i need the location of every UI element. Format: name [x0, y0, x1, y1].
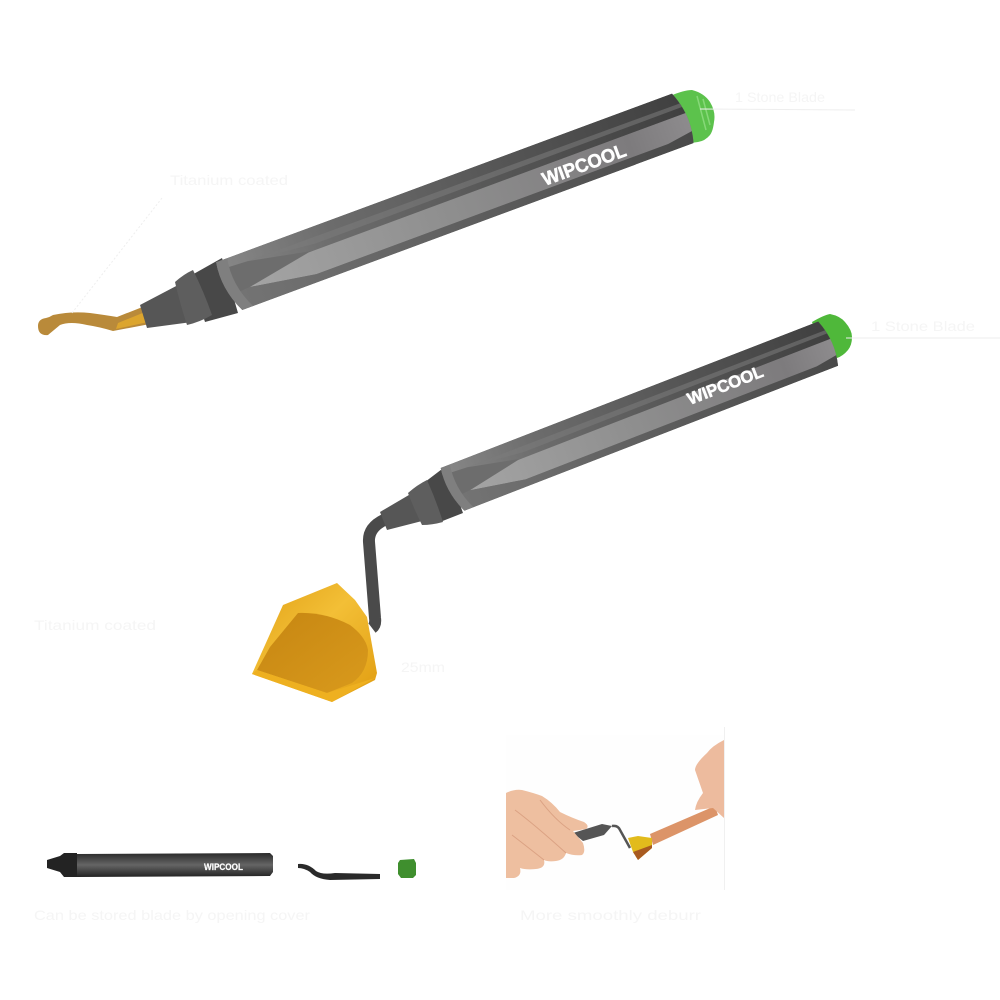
titanium coated blade: [38, 306, 150, 335]
photo background: [506, 735, 724, 890]
hooked shaft: [369, 519, 386, 628]
caption: storage: Can be stored blade by opening cover: [34, 907, 310, 923]
logo: WIPCOOL: [539, 140, 630, 191]
caption: deburr: More smoothly deburr: [520, 907, 701, 923]
gold cone cutter: [252, 583, 377, 702]
tool: hooked cone deburring pen: [252, 314, 852, 702]
small tool hook: [612, 826, 630, 848]
green cap: [812, 314, 852, 362]
left hand: [506, 790, 588, 878]
blade shank highlight: [116, 312, 148, 329]
small gold cone: [628, 836, 652, 860]
cone: [140, 284, 192, 328]
cutter face: [257, 613, 368, 693]
loose green cover: [398, 859, 416, 878]
finger creases: [512, 800, 570, 860]
photo: deburring a copper pipe: [506, 727, 724, 890]
label: blade middle: 1 Stone Blade: [871, 318, 975, 334]
collar ring: [408, 480, 443, 525]
collar ring: [175, 270, 212, 325]
label: titanium coated: Titanium coated: [170, 172, 288, 188]
cone: [380, 492, 426, 530]
bottom edge: [252, 670, 375, 702]
cone burnt edge: [633, 845, 652, 860]
loose blade: [298, 864, 380, 880]
cap ribs: [697, 96, 710, 130]
handle: [434, 316, 848, 516]
handle: [208, 87, 706, 317]
right hand: [695, 740, 724, 818]
small tool handle: [573, 824, 612, 841]
leader lines: [72, 109, 1000, 338]
tool: curved blade deburring pen: [38, 87, 714, 335]
dark cylinder: [425, 466, 463, 522]
label: blade top: 1 Stone Blade: [735, 89, 825, 105]
copper pipe: [650, 806, 718, 845]
dark cylinder: [190, 258, 238, 322]
small pen logo: WIPCOOL: [204, 862, 243, 872]
green cap: [670, 90, 714, 144]
small pen tip: [47, 853, 77, 877]
logo: WIPCOOL: [685, 362, 766, 409]
label: titanium coated cone: Titanium coated: [34, 617, 156, 633]
small tool parts: [47, 853, 416, 880]
small pen handle: [77, 853, 273, 877]
label: size: 25mm: [401, 659, 445, 675]
